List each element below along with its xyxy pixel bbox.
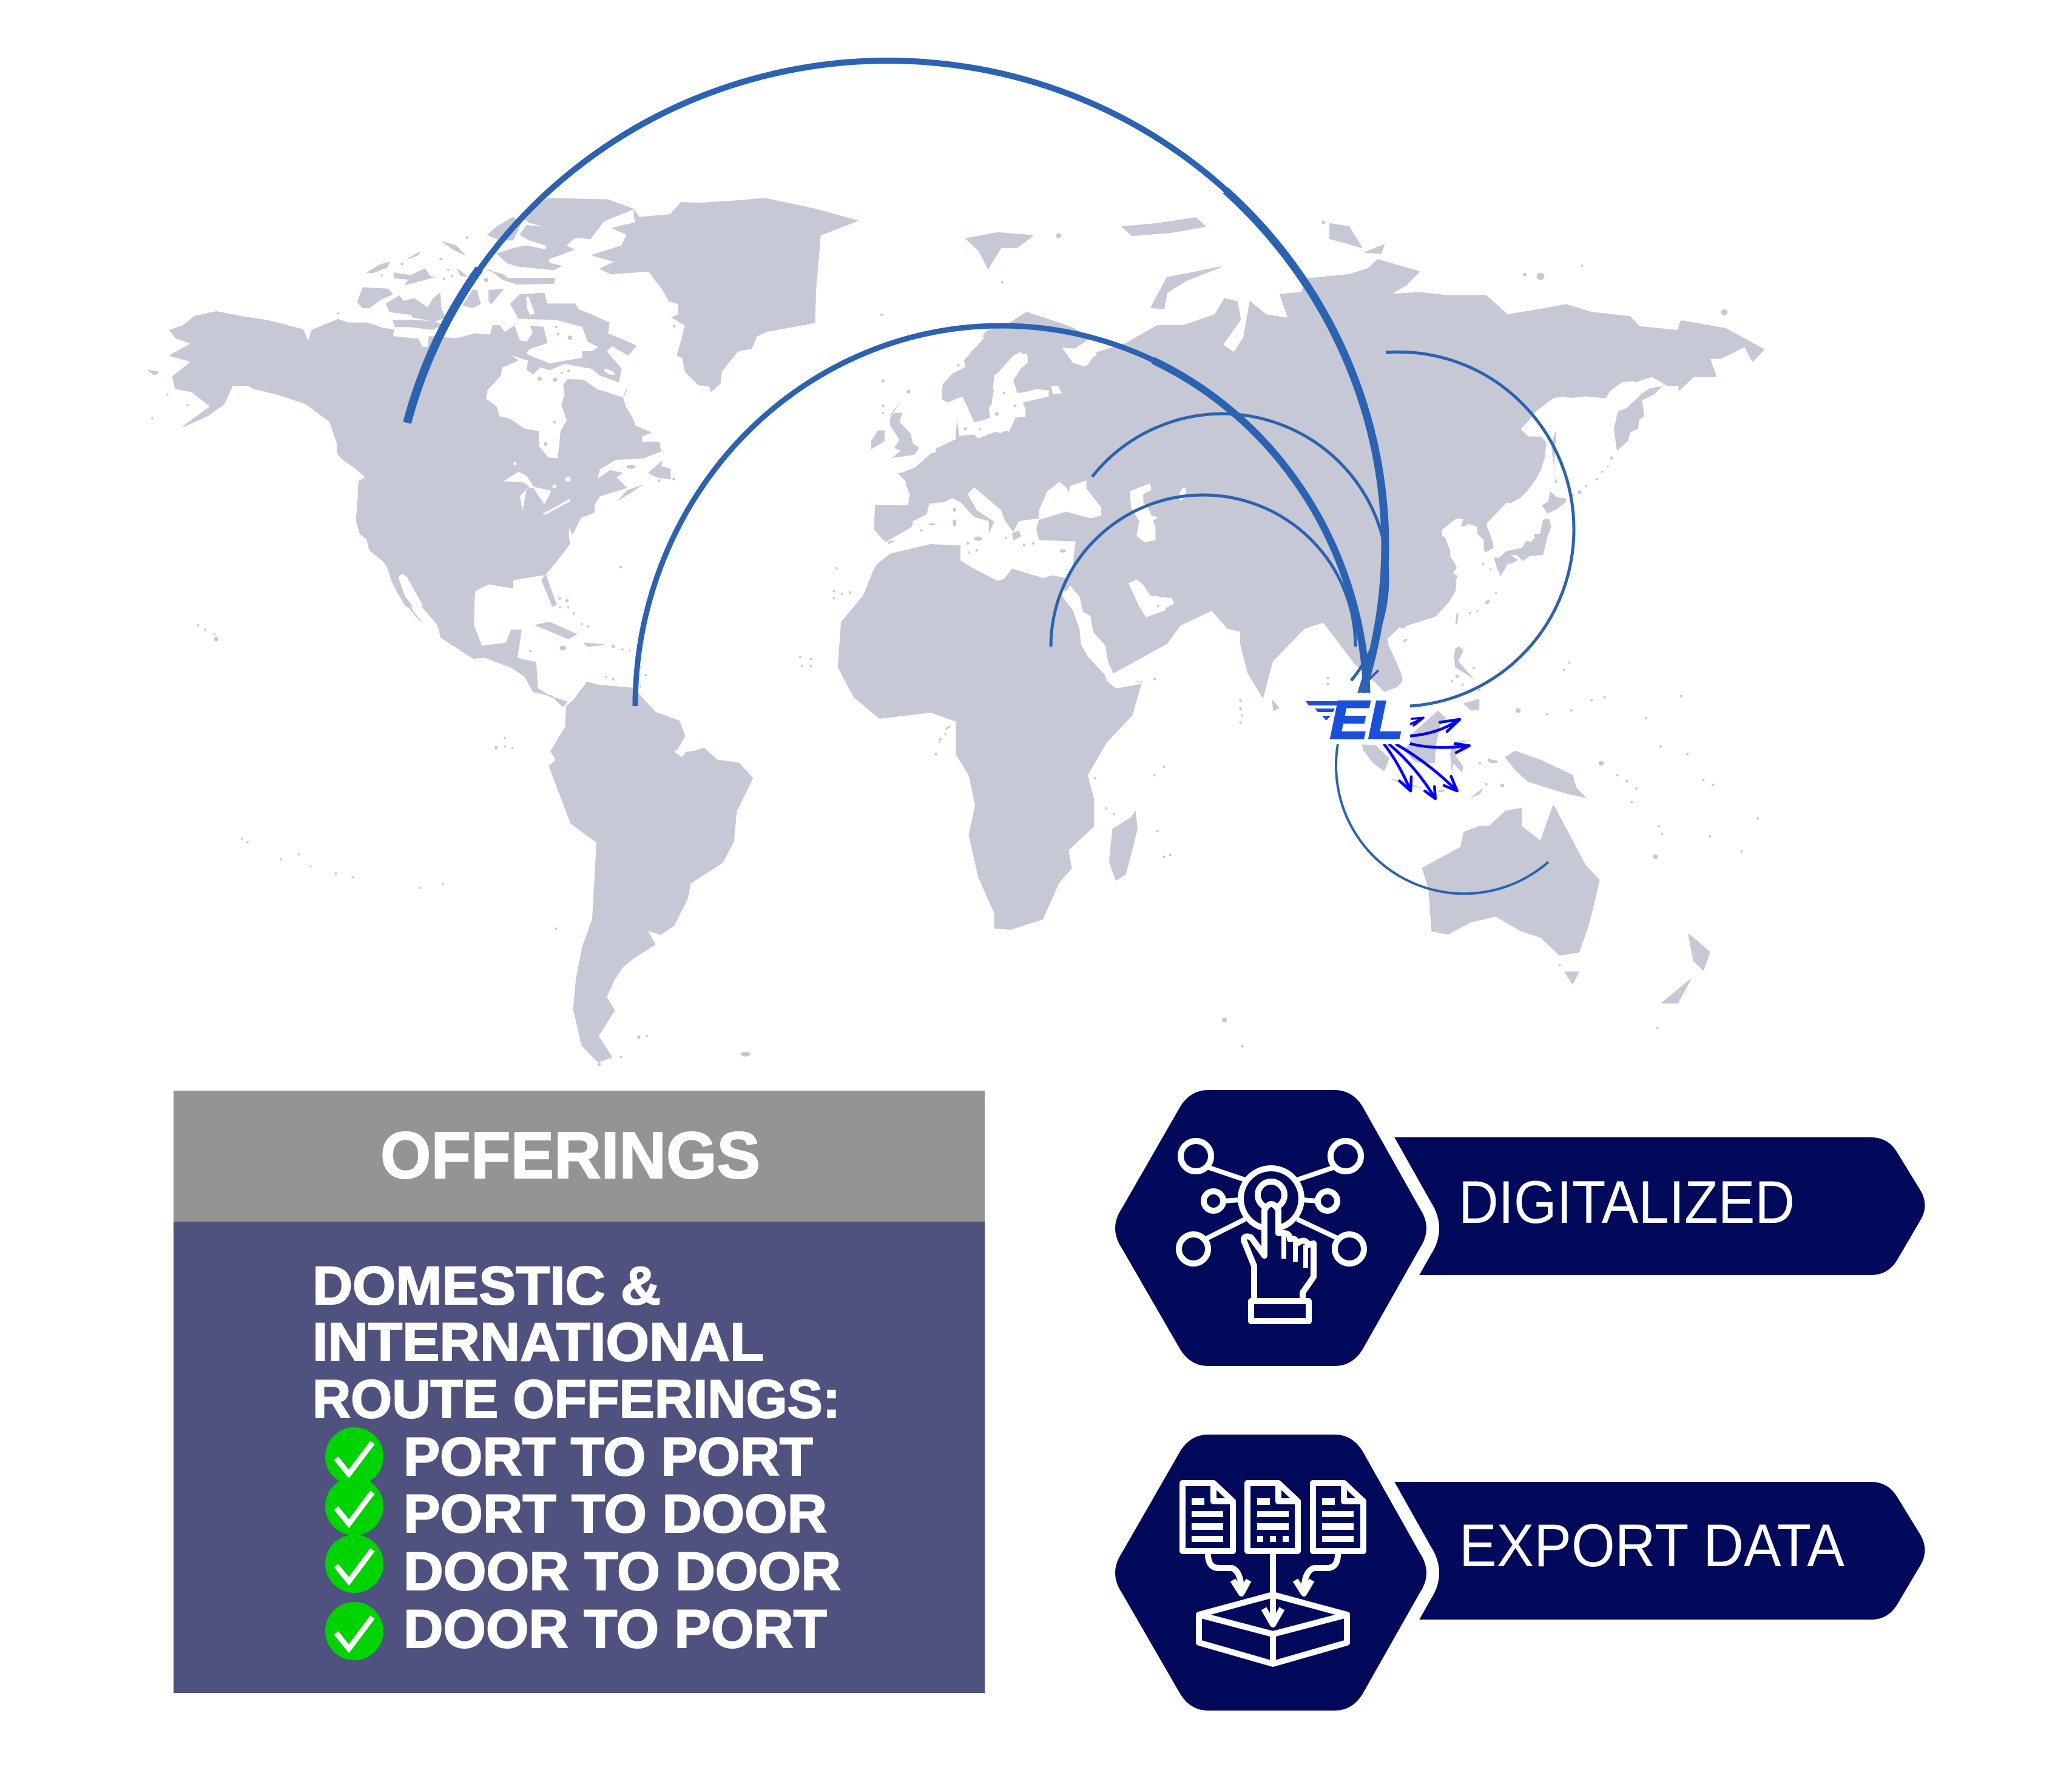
arrows: regional routes xyxy=(1385,718,1470,799)
hexagon xyxy=(1115,1090,1426,1366)
panel header xyxy=(174,1091,985,1222)
arctic islands xyxy=(497,198,633,270)
arc: North America route xyxy=(407,61,1385,693)
logo: EL: EL xyxy=(1330,690,1403,750)
arc: Black Sea route xyxy=(1092,414,1388,681)
list item: port to port: PORT TO PORT xyxy=(403,1426,813,1487)
text block: route offerings intro: INTERNATIONAL xyxy=(312,1311,764,1372)
logo-crop coordinates: Malay, Borneo, Sulawesi, Java xyxy=(1362,699,1504,799)
text block: route offerings intro: ROUTE OFFERINGS: xyxy=(312,1368,840,1429)
route arcs xyxy=(407,61,1574,893)
arc: Australia route xyxy=(1336,670,1548,893)
map: Alaska, southern North America and South America xyxy=(149,312,851,1066)
Greenland xyxy=(592,198,858,392)
logo: EL xyxy=(1304,690,1410,750)
heading: offerings: OFFERINGS xyxy=(380,1119,760,1193)
banner xyxy=(1389,1137,1925,1275)
text block: route offerings intro: DOMESTIC & xyxy=(312,1255,661,1316)
icon: network and hand xyxy=(1179,1141,1364,1321)
label: EXPORT DATA xyxy=(1459,1512,1844,1579)
badge: digitalized xyxy=(1115,1090,1925,1366)
list item: door to port: DOOR TO PORT xyxy=(403,1598,827,1659)
map: Europe and Middle East seas xyxy=(795,337,1243,756)
banner xyxy=(1389,1482,1925,1620)
icon: documents to box xyxy=(1183,1483,1363,1664)
hexagon xyxy=(1115,1435,1426,1711)
list item: door to door: DOOR TO DOOR xyxy=(403,1541,841,1601)
arc: Red Sea route xyxy=(1051,495,1355,647)
map: Eurasia, Africa and Oceania xyxy=(839,218,1764,1048)
text block: route offerings intro xyxy=(312,1255,840,1429)
arc: South America route xyxy=(635,326,1367,706)
list item: port to door: PORT TO DOOR xyxy=(403,1483,827,1544)
badge: export data xyxy=(1115,1435,1925,1711)
arc: East Asia route xyxy=(1386,352,1574,706)
panel: offerings xyxy=(174,1091,985,1693)
world map xyxy=(149,198,1764,1066)
map: East Asia and western Pacific xyxy=(1388,381,1679,692)
panel body xyxy=(174,1222,985,1693)
map: Canada and Greenland xyxy=(337,198,858,607)
label: DIGITALIZED xyxy=(1459,1168,1795,1236)
